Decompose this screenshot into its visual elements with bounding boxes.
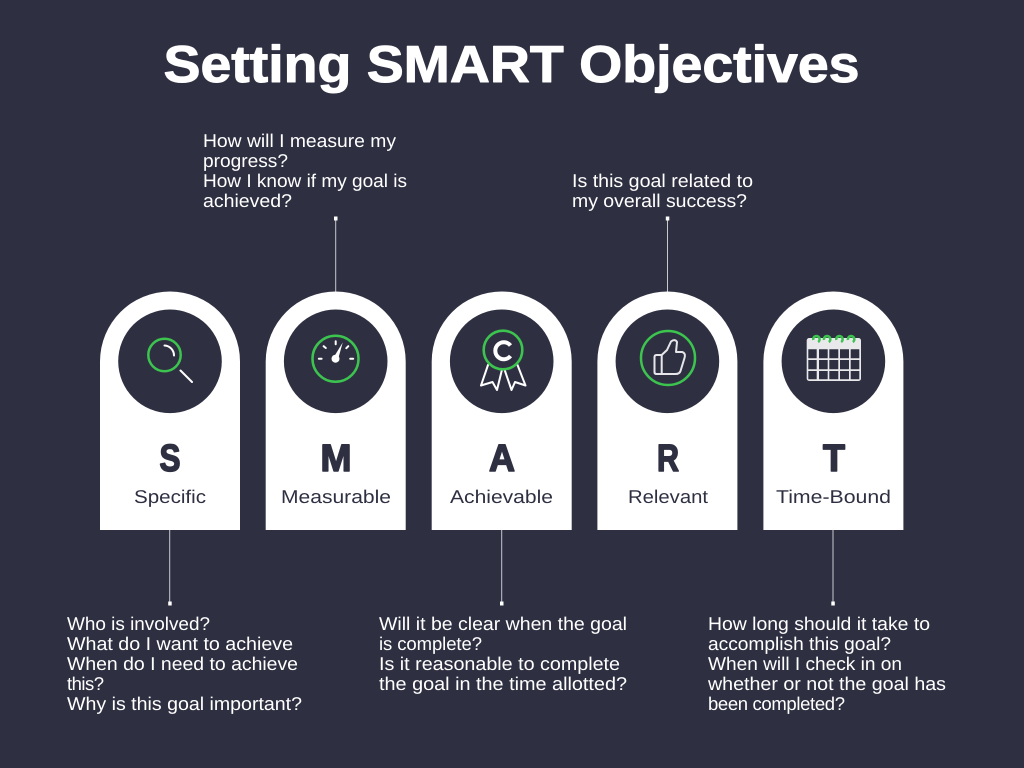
- text block: time-bound questions: whether or not the goal has: [707, 673, 946, 694]
- icon: award ribbon: [481, 331, 526, 390]
- text block: achievable questions: is complete?: [379, 633, 482, 654]
- letter T: T: [823, 438, 845, 480]
- card: achievable: [432, 292, 572, 530]
- text block: time-bound questions: When will I check in on: [708, 653, 902, 674]
- text block: achievable questions: [379, 613, 627, 694]
- text block: measurable questions: How will I measure my: [203, 130, 397, 151]
- letter A: A: [489, 438, 515, 480]
- icon: magnifying glass: [148, 339, 192, 382]
- text block: time-bound questions: been completed?: [708, 693, 845, 714]
- label: Measurable: Measurable: [281, 486, 391, 507]
- text block: measurable questions: progress?: [203, 150, 288, 171]
- text block: specific questions: What do I want to achieve: [67, 633, 293, 654]
- label: Achievable: Achievable: [450, 486, 553, 507]
- card: time-bound: [763, 292, 903, 530]
- text block: measurable questions: [203, 130, 407, 211]
- text block: specific questions: When do I need to achieve: [67, 653, 298, 674]
- connector: achievable: [500, 530, 504, 606]
- text block: measurable questions: How I know if my goal is: [203, 170, 407, 191]
- label: Relevant: Relevant: [628, 486, 708, 507]
- title: Setting SMART Objectives: [164, 36, 860, 94]
- icon: thumbs up: [641, 331, 695, 385]
- card: measurable: [266, 292, 406, 530]
- text block: relevant questions: Is this goal related to: [572, 170, 753, 191]
- text block: time-bound questions: [707, 613, 946, 714]
- text block: time-bound questions: accomplish this goal?: [708, 633, 891, 654]
- text block: specific questions: [67, 613, 302, 714]
- label: Specific: Specific: [134, 486, 206, 507]
- connector: relevant: [666, 216, 669, 293]
- text block: relevant questions: [572, 170, 753, 211]
- letter R: R: [657, 438, 679, 480]
- connector: measurable: [334, 216, 338, 293]
- card: relevant: [597, 292, 737, 530]
- text block: measurable questions: achieved?: [203, 190, 292, 211]
- card: specific: [100, 292, 240, 530]
- connector: specific: [168, 530, 172, 606]
- text block: achievable questions: Will it be clear when the goal: [379, 613, 627, 634]
- text block: achievable questions: the goal in the time allotted?: [379, 673, 627, 694]
- connector: time-bound: [831, 530, 835, 606]
- letter M: M: [320, 438, 352, 480]
- icon: calendar: [807, 336, 861, 381]
- letter S: S: [160, 438, 180, 480]
- text block: specific questions: Who is involved?: [67, 613, 210, 634]
- text block: relevant questions: my overall success?: [572, 190, 747, 211]
- text block: time-bound questions: How long should it take to: [708, 613, 930, 634]
- icon: gauge: [312, 336, 358, 382]
- text block: specific questions: this?: [67, 673, 104, 694]
- label: Time-Bound: Time-Bound: [776, 486, 891, 507]
- text block: specific questions: Why is this goal important?: [67, 693, 302, 714]
- text block: achievable questions: Is it reasonable to complete: [379, 653, 620, 674]
